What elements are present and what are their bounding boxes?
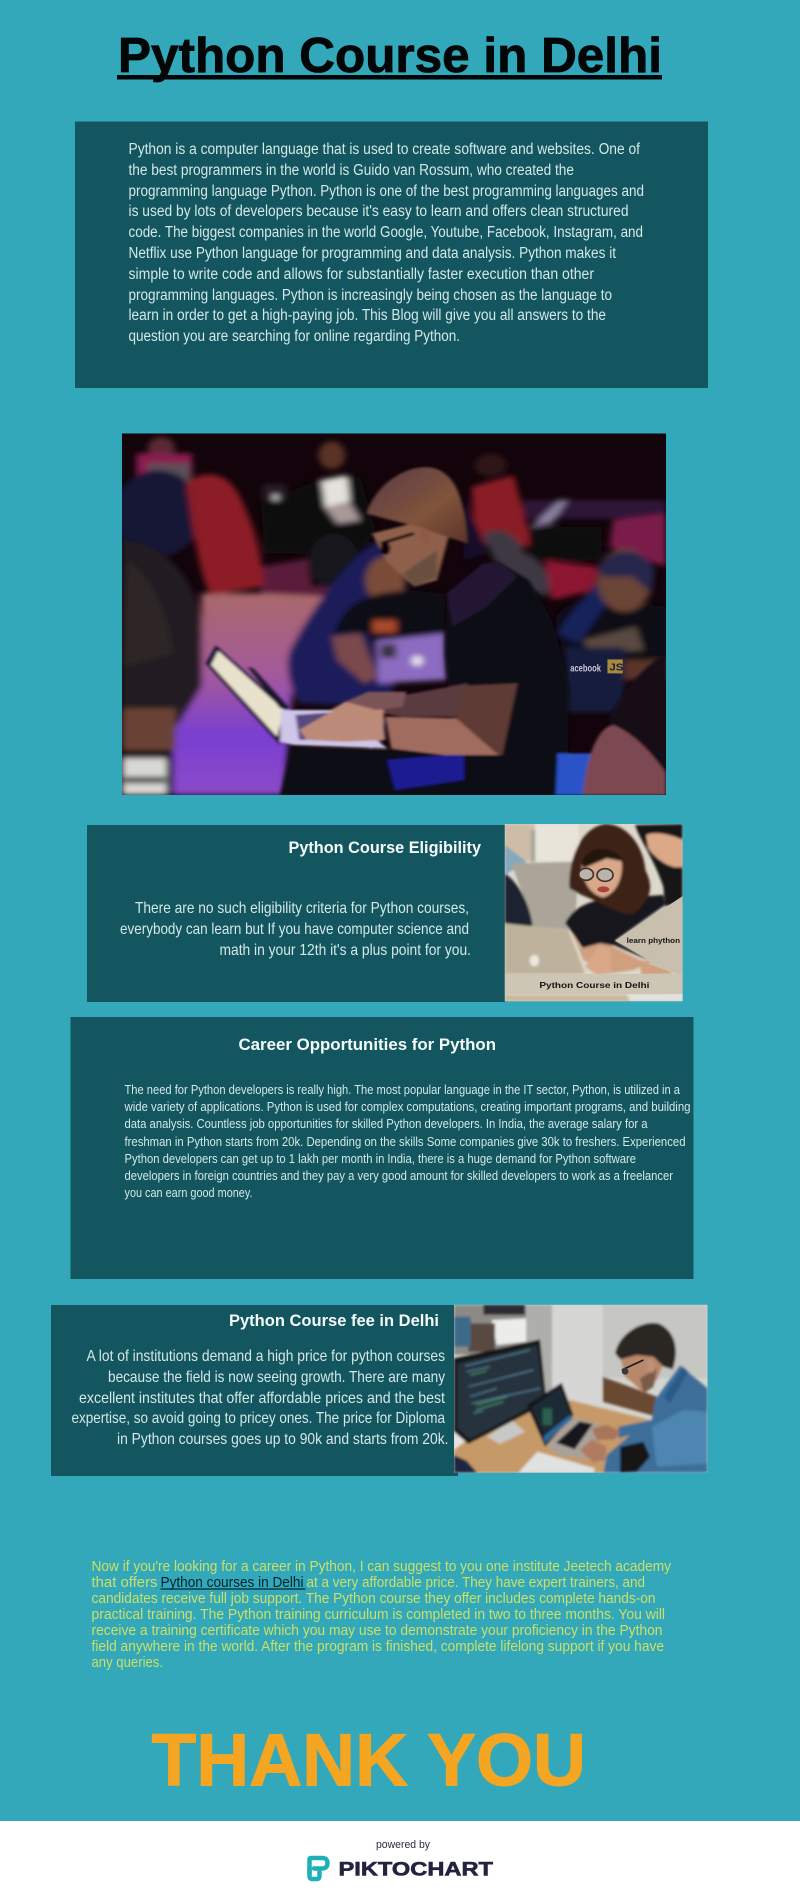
paper <box>518 1452 595 1473</box>
heading: THANK YOU: THANK YOU <box>152 1718 586 1802</box>
text block: recommendation: candidates receive full job support. The Python course they offer includes complete hands-on <box>92 1591 656 1607</box>
panel: Python Course fee in Delhi <box>51 1305 458 1476</box>
text block: recommendation: at a very affordable price. They have expert trainers, and <box>306 1575 645 1591</box>
text block: recommendation: field anywhere in the world. After the program is finished, complete lifelong support if you have <box>92 1639 664 1655</box>
heading: Career Opportunities for Python: Career Opportunities for Python <box>238 1036 496 1054</box>
photo: programmers at a hackathon: acebook <box>570 663 601 675</box>
text block: fee: because the field is now seeing growth. There are many <box>108 1369 445 1386</box>
main man <box>280 562 569 795</box>
foreground person right <box>583 725 666 795</box>
title: Python Course in Delhi <box>118 29 662 83</box>
text block: recommendation: practical training. The Python training curriculum is completed in two to three months. You will <box>92 1607 665 1623</box>
text block: eligibility: math in your 12th it's a plus point for you. <box>220 942 471 959</box>
heading: Python Course fee in Delhi: Python Course fee in Delhi <box>229 1312 439 1330</box>
text block: career: you can earn good money. <box>124 1185 252 1200</box>
monitor <box>487 1420 525 1444</box>
text block: eligibility: There are no such eligibility criteria for Python courses, <box>135 900 469 917</box>
wordmark: PIKTOCHART: PIKTOCHART <box>338 1859 493 1881</box>
laptop <box>527 1383 573 1447</box>
text block: introduction: Netflix use Python language for programming and data analysis. Python makes it <box>128 245 617 262</box>
text block: introduction <box>128 141 644 345</box>
text block: eligibility <box>120 900 471 959</box>
text block: introduction: is used by lots of developers because it's easy to learn and offers clean structured <box>128 203 628 220</box>
glasses and mouth <box>579 868 593 880</box>
text block: fee: A lot of institutions demand a high price for python courses <box>86 1348 445 1365</box>
panel: introduction <box>75 122 708 388</box>
laptop <box>205 645 289 745</box>
photo: programmers at a hackathon <box>122 434 666 795</box>
woman: shirt <box>565 895 665 962</box>
text block: introduction: learn in order to get a high-paying job. This Blog will give you all answers to the <box>128 307 606 324</box>
hands <box>592 1425 620 1440</box>
text block: recommendation <box>92 1559 672 1671</box>
text block: recommendation: any queries. <box>92 1655 163 1671</box>
arms <box>361 683 468 717</box>
text block: career: freshman in Python starts from 20k. Depending on the skills Some companies give 30k to freshers. Experienced <box>124 1134 686 1149</box>
text block: recommendation: that offers <box>92 1575 158 1591</box>
photo: students with laptop and captions <box>504 824 683 1002</box>
text block: career <box>124 1082 691 1200</box>
heading: Python Course Eligibility: Python Course Eligibility <box>288 839 482 857</box>
text block: introduction: programming languages. Python is increasingly being chosen as the language to <box>128 287 612 304</box>
text block: introduction: simple to write code and allows for substantially faster execution than other <box>128 266 594 283</box>
laptop <box>505 923 585 974</box>
right person <box>556 598 666 673</box>
panel: Career Opportunities for Python <box>70 1017 694 1279</box>
caption: Python Course in Delhi: Python Course in Delhi <box>539 981 649 990</box>
footer: powered by Piktochart <box>0 1821 800 1901</box>
man body <box>603 1365 708 1473</box>
text block: introduction: code. The biggest companies in the world Google, Youtube, Facebook, Instagram, and <box>128 224 643 241</box>
floor details and left box <box>122 708 176 750</box>
text block: career: Python developers can get up to 1 lakh per month in India, there is a huge demand for Python software <box>124 1151 636 1166</box>
back people <box>148 437 175 460</box>
text block: introduction: the best programmers in the world is Guido van Rossum, who created the <box>128 162 574 179</box>
text block: career: data analysis. Countless job opportunities for skilled Python developers. In India, the average salary for a <box>124 1116 648 1131</box>
text block: career: wide variety of applications. Python is used for complex computations, creating important programs, and building <box>124 1099 691 1114</box>
head <box>620 1343 663 1393</box>
photo: developer at a desk with monitor and laptop <box>454 1304 708 1473</box>
photo: programmers at a hackathon: JS <box>609 662 623 674</box>
head <box>372 520 449 587</box>
text block: introduction: Python is a computer language that is used to create software and websites. One of <box>128 141 641 158</box>
panel: Python Course Eligibility <box>87 825 505 1002</box>
link: Python courses in Delhi: Python courses in Delhi <box>160 1575 304 1591</box>
text block: introduction: question you are searching for online regarding Python. <box>128 328 460 345</box>
woman: hair <box>569 824 650 914</box>
text block: career: The need for Python developers is really high. The most popular language in the IT sector, Python, is utilized in a <box>124 1082 681 1097</box>
text block: recommendation: receive a training certificate which you may use to demonstrate your proficiency in the Python <box>92 1623 662 1639</box>
caption: learn phython: learn phython <box>627 938 680 945</box>
text block: fee: expertise, so avoid going to pricey ones. The price for Diploma <box>72 1410 445 1427</box>
hood <box>483 530 549 597</box>
caption triangle <box>615 896 683 974</box>
text block: recommendation: Now if you're looking for a career in Python, I can suggest to you one institute Jeetech academy <box>92 1559 672 1575</box>
text block: career: developers in foreign countries and they pay a very good amount for skilled developers to work as a freelancer <box>124 1168 674 1183</box>
powered by label: powered by <box>376 1839 430 1851</box>
second woman <box>635 824 683 906</box>
text block: fee: excellent institutes that offer affordable prices and the best <box>79 1390 445 1407</box>
text block: eligibility: everybody can learn but If you have computer science and <box>120 921 469 938</box>
text block: fee <box>72 1348 448 1448</box>
text block: fee: in Python courses goes up to 90k and starts from 20k. <box>117 1431 448 1448</box>
desk <box>454 1400 650 1473</box>
text block: introduction: programming language Python. Python is one of the best programming languages and <box>128 183 644 200</box>
icon: Piktochart logo <box>310 1858 328 1879</box>
centre person <box>288 540 406 707</box>
right back <box>475 453 507 477</box>
arm <box>572 932 652 973</box>
